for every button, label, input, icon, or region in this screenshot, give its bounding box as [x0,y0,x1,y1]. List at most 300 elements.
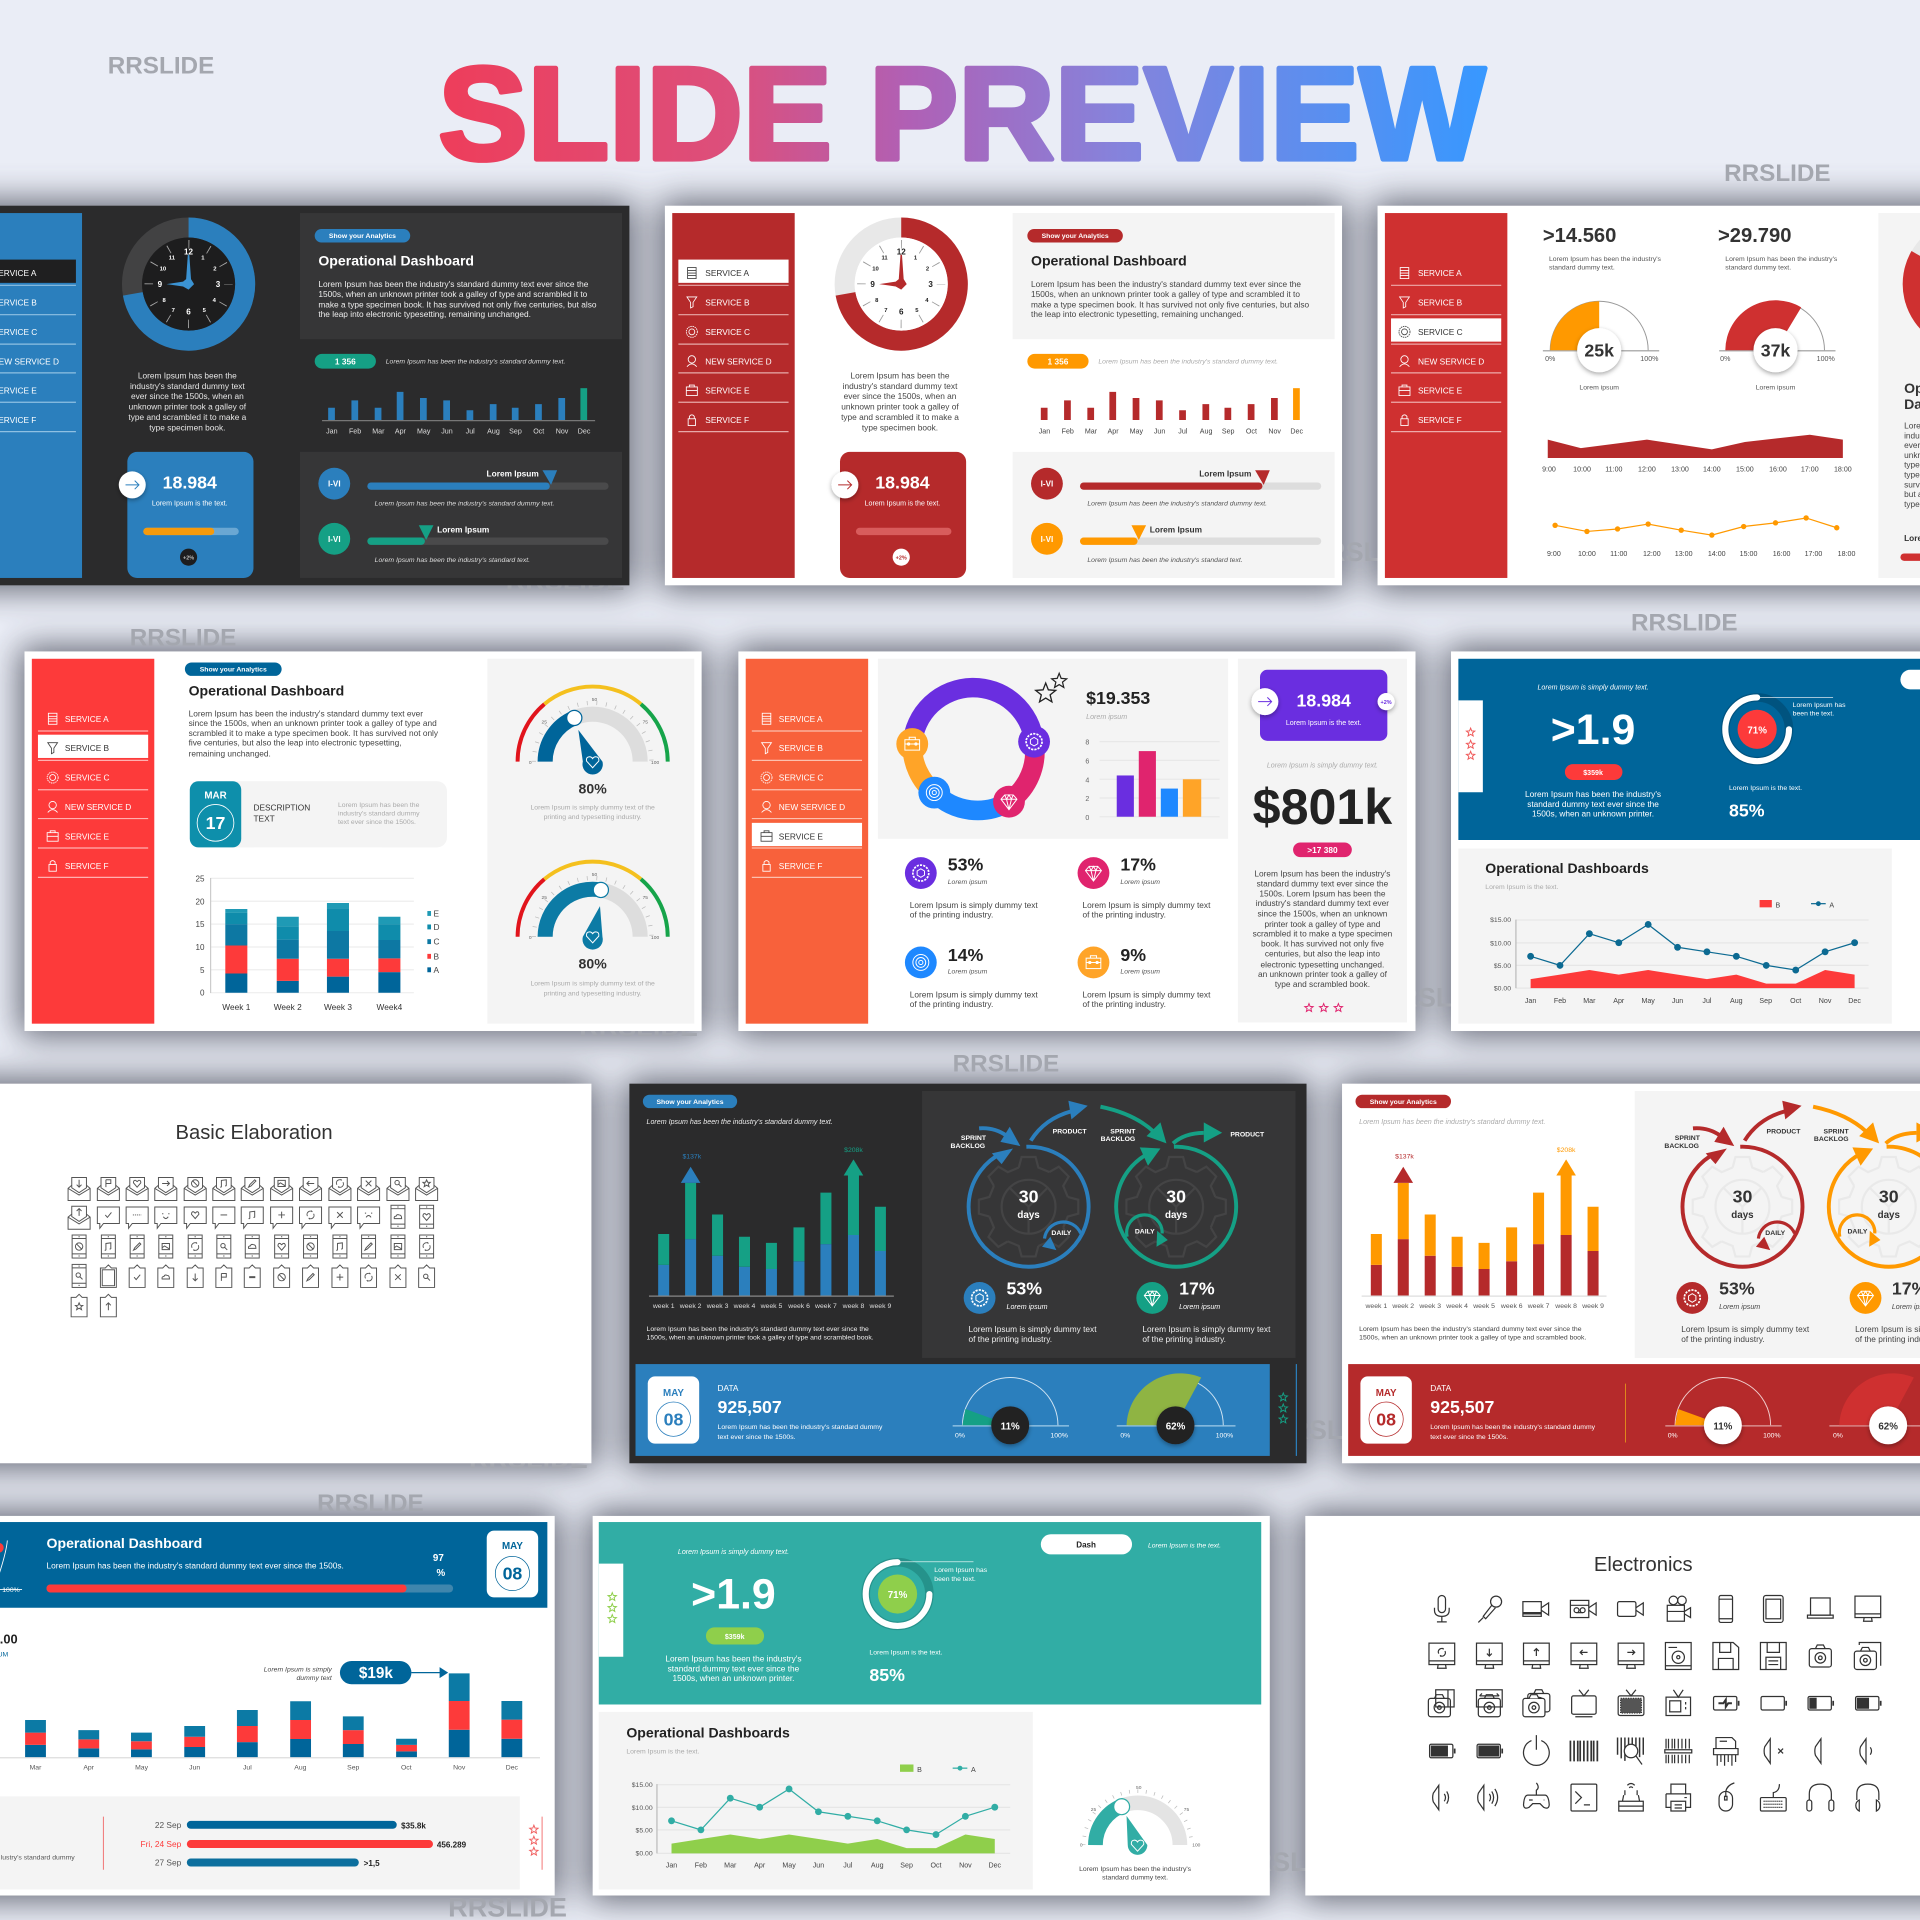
clock caption: unknown printer took a galley of [129,402,247,412]
revenue mini chart: 0 [1085,814,1089,822]
weekly chart: $137k [683,1153,702,1160]
small gauge: 100 [1192,1843,1201,1849]
line chart panel: $10.00 [1490,940,1511,947]
header band: 100% [2,1587,20,1594]
date card: Lorem Ipsum has been the [338,802,420,809]
intro panel: the leap into electronic typesetting, remaining unchanged. [318,309,531,319]
sprint cycle 1: 30 [1019,1186,1039,1206]
weekly chart: Lorem Ipsum has been the industry's standard dummy text. [1359,1118,1545,1126]
date bars panel: >1,5 [364,1859,380,1868]
line chart panel: Jul [843,1861,853,1869]
sidebar [672,213,795,578]
gauge: 25k: 100% [1640,355,1659,363]
clock gauge: 2 [213,267,217,273]
monthly bar chart: Apr [1108,427,1119,435]
monthly bar chart: Aug [1200,427,1212,435]
stacked bar chart: Week 3 [324,1002,352,1012]
small gauge: Lorem Ipsum has been the industry's [1079,1866,1192,1873]
weekly chart: Show your Analytics [656,1099,724,1106]
area chart: 13:00 [1671,465,1689,473]
gauge 2: 50 [592,872,597,878]
right panel (cropped) [1878,213,1920,578]
revenue mini chart: 6 [1085,757,1089,765]
monthly bar chart: Jul [466,427,475,435]
sprint labels: SPRINT [961,1135,987,1142]
stacked bar chart: Week 1 [222,1002,251,1012]
date bars panel: 22 Sep [155,1820,182,1830]
stat: 53%: of the printing industry. [910,910,993,920]
watermarks: RRSLIDE [506,566,624,596]
clock gauge: 4 [213,298,217,304]
big number panel: +2% [1381,700,1392,706]
stat: 17%: 17% [1120,855,1156,875]
clock gauge: 1 [914,256,918,262]
line chart: 14:00 [1708,550,1726,558]
stacked bar chart: A [433,965,439,975]
sprint labels [951,1128,1265,1150]
watermarks: RRSLIDE [1233,1847,1352,1877]
sidebar: SERVICE F [779,861,823,871]
area chart: 10:00 [1573,465,1591,473]
clock caption: industry's standard dummy text [130,381,245,391]
sidebar: SERVICE F [1418,415,1462,425]
monthly bar chart: Dec [1290,427,1303,435]
line chart panel [1458,849,1892,1024]
progress panel: I-VI [1041,535,1053,544]
mini gauge 62%: 62% [1166,1422,1186,1433]
monthly bar chart: May [1130,427,1143,435]
sprint cycle 1: DAILY [1765,1230,1786,1237]
stacked month chart: Nov [453,1764,466,1771]
date bars panel: $35.8k [401,1821,426,1830]
mini gauge 62%: 0% [1833,1433,1843,1440]
kpi banner: standard dummy text ever since the [668,1663,800,1673]
revenue mini chart: 4 [1085,776,1089,784]
data band: 08 [1376,1409,1396,1429]
line chart: 11:00 [1610,550,1627,558]
gauge 1: 25 [542,720,547,726]
header band: Lorem Ipsum has been the industry's standard dummy text ever since the 1500s. [47,1561,344,1571]
kpi banner: Lorem Ipsum is the text. [869,1649,943,1656]
intro panel: the leap into electronic typesetting, remaining unchanged. [1031,309,1244,319]
sidebar: SERVICE A [705,268,749,278]
sprint stat 17% [1136,1278,1271,1344]
area chart: 11:00 [1605,465,1623,473]
stat: 9%: Lorem ipsum [1120,968,1160,975]
intro panel: Lorem Ipsum has been the industry's standard dummy text ever since the [318,279,589,289]
sidebar [746,659,868,1024]
data band: MAY [1376,1388,1397,1399]
monthly bar chart [1027,354,1303,435]
clock caption [128,370,247,432]
monthly bar chart [315,354,595,435]
sprint stat 17%: Lorem Ipsum is simply dummy text [1142,1324,1271,1334]
watermarks: RRSLIDE [1270,1415,1389,1445]
intro text: Operational Dashboard [189,683,344,699]
stat: 53%: Lorem Ipsum is simply dummy text [910,900,1038,910]
big number panel [1238,659,1407,1022]
big number panel: 18.984 [1297,691,1351,711]
stacked month chart: May [135,1764,149,1771]
kpi banner [599,1522,1261,1704]
sidebar: SERVICE E [1418,386,1463,396]
intro panel: Show your Analytics [1042,233,1109,240]
data band: 925,507 [718,1397,782,1417]
gauge 2: 80% [579,956,607,972]
clock caption: Lorem Ipsum has been the [851,370,950,380]
gauge 2: 100 [651,935,659,941]
line chart panel: Operational Dashboards [1485,860,1649,876]
stat: 53%: 53% [948,855,983,875]
monthly bar chart: Feb [349,427,361,435]
date card: text ever since the 1500s. [338,819,416,826]
clock gauge: 9 [158,280,163,289]
stacked bar chart: E [433,909,439,919]
sprint labels: PRODUCT [1230,1131,1265,1138]
mini gauge 11%: 0% [955,1433,965,1440]
stat card: Lorem Ipsum is the text. [152,500,228,508]
mini gauge 11%: 100% [1763,1433,1781,1440]
clock gauge: 7 [172,308,175,314]
stat card: 18.984 [875,473,930,493]
clock caption [841,370,959,432]
line chart panel: Jul [1702,997,1712,1005]
monthly bar chart: 1 356 [335,356,356,366]
weekly chart: 1500s, when an unknown printer took a galley of type and scrambled book. [1359,1335,1586,1342]
weekly chart: week 2 [679,1303,702,1310]
kpi banner: 1500s, when an unknown printer. [672,1673,794,1683]
gauge 2: 25 [542,895,547,901]
clock gauge: 2 [926,267,930,273]
line chart panel: Mar [724,1861,737,1869]
line chart panel: $10.00 [632,1805,653,1812]
intro panel [1013,213,1335,339]
sidebar: SERVICE E [65,831,110,841]
line chart panel: Apr [1613,997,1625,1005]
callout: Lorem Ipsum is simply [264,1666,332,1673]
kpi banner: Lorem Ipsum is the text. [1148,1543,1221,1550]
sprint stat 53%: of the printing industry. [1681,1334,1765,1344]
big number panel: an unknown printer took a galley of [1258,969,1388,979]
kpi banner: $359k [1583,769,1603,777]
sprint cycle 1 [1682,1101,1802,1267]
line chart panel: $5.00 [636,1827,653,1834]
stacked bar chart [195,875,439,1012]
mini gauge 62%: 100% [1216,1433,1233,1440]
clock gauge: 5 [203,308,207,314]
mini gauge 62%: 0% [1120,1433,1130,1440]
big number panel: scrambled it to make a type specimen [1253,929,1393,939]
stacked month chart: Sep [347,1764,360,1771]
kpi banner: Lorem Ipsum is the text. [1729,785,1802,792]
stat: 17%: Lorem Ipsum is simply dummy text [1082,900,1211,910]
sidebar: NEW SERVICE D [1418,356,1484,366]
intro text: scrambled it to make a type specimen book. It has survived not only [189,728,439,738]
gauge 2 [518,862,668,998]
watermarks: RRSLIDE [469,1444,588,1474]
header band: Operational Dashboard [47,1535,202,1551]
sidebar: SERVICE C [1418,327,1463,337]
gauge 1: 80% [579,780,607,796]
intro text [185,662,439,759]
kpi banner: 1500s, when an unknown printer. [1532,809,1654,819]
weekly chart: week 8 [1554,1303,1577,1310]
sidebar: SERVICE E [705,386,750,396]
sprint cycle 1: DAILY [1051,1230,1072,1237]
big number panel: electronic typesetting unchanged. [1261,959,1384,969]
intro panel: make a type specimen book. It has survived not only five centuries, but also [318,299,597,309]
sidebar [32,659,154,1024]
gauge: 37k: 0% [1720,355,1731,363]
monthly bar chart: Lorem Ipsum has been the industry's standard dummy text. [1098,359,1278,366]
stacked bar chart: 0 [200,989,205,998]
data band [1348,1364,1920,1456]
heading: Basic Elaboration [176,1122,333,1144]
weekly chart: week 1 [1364,1303,1387,1310]
progress panel: Lorem Ipsum has been the industry's standard dummy text. [1087,501,1267,508]
sidebar: SERVICE C [779,773,823,783]
line chart panel: Jan [1525,997,1536,1005]
kpi banner: 71% [888,1590,908,1601]
monthly bar chart: Lorem Ipsum has been the industry's standard dummy text. [386,359,566,366]
kpi headers [1543,225,1838,271]
intro text: five centuries, but also the leap into electronic typesetting, [189,738,402,748]
clock gauge: 10 [872,267,880,273]
mini gauge 11%: 11% [1001,1422,1020,1433]
sprint stat 53%: Lorem Ipsum is simply dummy text [1681,1324,1810,1334]
stat: 14% [905,945,1038,1009]
header band: 97 [433,1553,444,1564]
line chart panel: Sep [1759,997,1772,1005]
line chart panel: Nov [1819,997,1832,1005]
weekly chart: Lorem Ipsum has been the industry's standard dummy text ever since the [1359,1326,1582,1333]
weekly chart: $208k [1557,1147,1576,1154]
stacked month chart: Aug [294,1764,307,1771]
line chart panel: Dec [1848,997,1861,1005]
big number panel: >17 380 [1307,845,1338,855]
clock gauge [132,228,245,341]
clock gauge: 10 [160,267,167,273]
weekly chart: week 6 [787,1303,810,1310]
weekly chart: week 4 [733,1303,756,1310]
monthly bar chart: May [417,427,431,435]
line chart panel: Oct [1790,997,1801,1005]
progress panel: I-VI [1041,480,1053,489]
sprint labels: SPRINT [1110,1128,1136,1135]
slide 9: light sprint dashboard [1342,1084,1920,1463]
small gauge: 50 [1136,1785,1142,1791]
area chart: 9:00 [1542,465,1556,473]
kpi headers: >29.790 [1718,225,1792,247]
date bars panel: 27 Sep [155,1857,182,1867]
area chart [1542,435,1852,473]
stacked bar chart: C [433,937,439,947]
slide 7: basic elaboration icons [0,1084,591,1463]
title: SLIDE PREVIEW [438,40,1485,188]
line chart panel: May [1641,997,1655,1005]
data band: DATA [718,1383,739,1393]
callout [264,1661,448,1684]
intro panel: 1500s, when an unknown printer took a galley of type and scrambled it to [1031,289,1300,299]
gauge: 25k: 25k [1584,340,1614,360]
big number panel: standard dummy text ever since the [1257,879,1389,889]
line chart panel: Mar [1583,997,1596,1005]
icon grid [1428,1596,1881,1811]
gauge: 25k: 0% [1545,355,1556,363]
mini gauge 62%: 62% [1878,1422,1898,1433]
progress panel: Lorem Ipsum [437,525,489,535]
sidebar: SERVICE E [779,831,823,841]
revenue mini chart: $19.353 [1086,688,1150,708]
stacked month chart: Oct [401,1764,412,1771]
clock caption: Lorem Ipsum has been the [138,370,237,380]
sprint cycle 1: days [1017,1210,1040,1221]
line chart panel: Aug [871,1861,884,1869]
data band: DATA [1430,1383,1452,1393]
header band [0,1522,547,1608]
clock gauge: 6 [899,308,904,317]
gauge: 37k: 37k [1761,340,1790,360]
monthly bar chart: Sep [509,427,522,435]
sidebar: SERVICE B [1418,298,1463,308]
area chart: 12:00 [1638,465,1656,473]
slide 6: blue kpi banner with line chart [1451,651,1920,1031]
kpi banner: $359k [725,1633,745,1641]
date card [190,781,447,847]
monthly bar chart: Mar [372,427,385,435]
sprint stat 53%: 53% [1719,1278,1755,1298]
line chart [1547,515,1855,558]
clock gauge: 3 [928,280,933,289]
stacked month chart: Jun [189,1764,200,1771]
kpi banner [1458,659,1920,840]
slide 10: operational dashboard with bars [0,1516,555,1896]
line chart panel: $5.00 [1494,963,1511,970]
stacked bar chart: B [433,951,439,961]
monthly bar chart: Oct [1246,427,1257,435]
big number panel: 1500s. Lorem Ipsum has been the [1259,888,1386,898]
monthly bar chart: Feb [1062,427,1074,435]
clock caption: ever since the 1500s, when an [844,391,957,401]
monthly bar chart: Nov [556,427,569,435]
line chart panel: Aug [1730,997,1743,1005]
watermarks: RRSLIDE [1379,983,1498,1013]
watermarks: RRSLIDE [953,1050,1059,1077]
sprint labels: BACKLOG [1664,1143,1699,1150]
watermarks: RRSLIDE [1631,610,1738,637]
line chart panel: $0.00 [1494,986,1511,993]
progress panel [300,452,622,578]
gauge 2: 0 [529,935,532,941]
date bars panel: 456.289 [437,1841,467,1850]
progress panel: Lorem Ipsum [1150,525,1202,535]
sprint cycle 1: 30 [1733,1186,1752,1206]
rating strip [1279,1364,1296,1456]
kpi banner: Lorem Ipsum has [1793,702,1846,709]
date bars panel [0,1796,542,1889]
weekly chart: week 4 [1445,1303,1468,1310]
stat card: Lorem Ipsum is the text. [865,500,940,508]
weekly chart: week 7 [814,1303,837,1310]
kpi banner: 85% [869,1665,905,1685]
monthly bar chart: Jul [1178,427,1188,435]
sprint stat 17%: 17% [1179,1278,1215,1298]
sidebar: SERVICE B [705,298,750,308]
monthly bar chart: 1 356 [1048,356,1069,366]
clock gauge [845,228,958,341]
mini gauge 11%: 11% [1713,1422,1733,1433]
line chart panel: Oct [930,1861,942,1869]
gauge 2: Lorem Ipsum is simply dummy text of the [530,981,655,988]
progress panel: Lorem Ipsum has been the industry's standard dummy text. [375,501,555,508]
gauge 1: printing and typesetting industry. [544,814,642,821]
weekly chart: week 3 [1418,1303,1441,1310]
clock gauge: 4 [925,298,929,304]
line chart panel: $15.00 [1490,917,1511,924]
line chart panel [599,1712,1033,1889]
progress panel: I-VI [328,535,341,544]
stacked bar chart: Week 2 [274,1002,302,1012]
kpi headers: standard dummy text. [1725,264,1791,271]
kpi banner: Lorem Ipsum is simply dummy text. [678,1548,789,1556]
slide 5: donut and big number [738,651,1416,1031]
weekly chart: week 5 [760,1303,782,1310]
progress panel [1013,452,1335,578]
line chart panel: Nov [959,1861,972,1869]
revenue mini chart: 2 [1085,795,1089,803]
sidebar: SERVICE F [65,861,109,871]
gauge 1 [518,687,668,821]
kpi headers: standard dummy text. [1549,264,1615,271]
intro panel: 1500s, when an unknown printer took a galley of type and scrambled it to [318,289,588,299]
sprint cycle 2: days [1165,1210,1188,1221]
intro text: Show your Analytics [200,667,267,674]
watermarks: RRSLIDE [579,1012,698,1042]
stat card [119,452,253,578]
intro panel: Show your Analytics [329,233,396,240]
kpi banner: 85% [1729,801,1765,821]
gauge 1: Lorem Ipsum is simply dummy text of the [530,804,655,811]
stat: 17%: Lorem ipsum [1120,879,1160,886]
small gauge: 25 [1091,1807,1096,1813]
clock caption: type and scrambled it to make a [841,412,959,422]
intro panel [300,213,622,339]
sprint stat 53% [1676,1278,1810,1344]
line chart panel: B [917,1766,922,1774]
line chart panel: Lorem Ipsum is the text. [626,1748,699,1755]
clock gauge: 11 [169,256,176,262]
clock caption: industry's standard dummy text [843,381,958,391]
clock gauge: 11 [881,256,888,262]
icon grid [68,1177,438,1317]
slide 8: dark sprint dashboard [629,1084,1307,1463]
sidebar: SERVICE A [65,714,109,724]
monthly bar chart: Oct [533,427,544,435]
line chart: 16:00 [1773,550,1791,558]
clock gauge: 3 [216,280,221,289]
kpi banner: Lorem Ipsum has been the industry's [1525,789,1661,799]
stat: 14%: Lorem ipsum [948,968,988,975]
clock gauge: 8 [875,298,879,304]
weekly chart: $208k [844,1147,863,1154]
watermarks: RRSLIDE [1307,537,1425,567]
watermarks: RRSLIDE [1724,160,1831,187]
intro text: since the 1500s, when an unknown printer took a galley of type and [189,718,437,728]
donut panel [878,659,1228,839]
line chart panel: Feb [695,1861,707,1869]
slide 3: gauges and time series [1378,206,1920,585]
big number panel: type and scrambled book. [1275,979,1370,989]
